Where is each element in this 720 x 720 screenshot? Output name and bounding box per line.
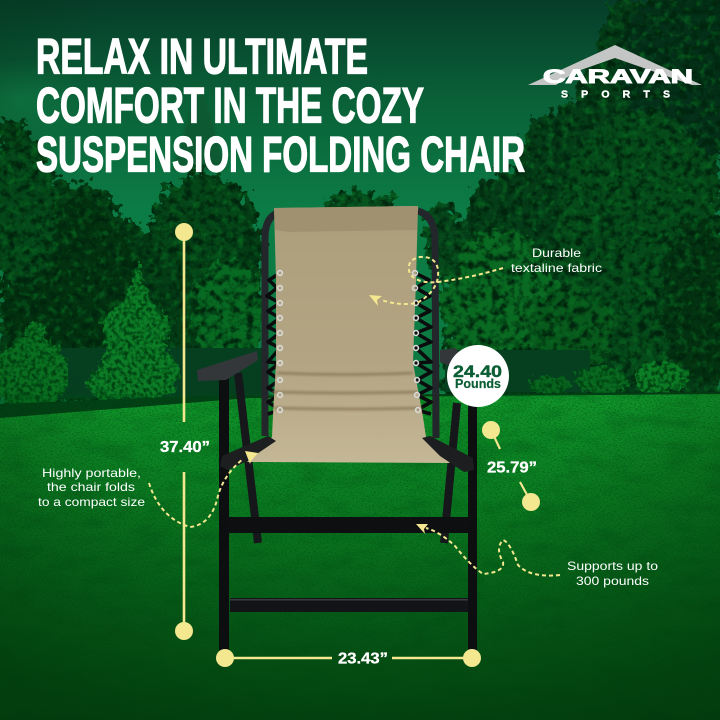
logo: Caravan Sports <box>528 45 702 100</box>
folding chair <box>197 206 477 650</box>
fabric sling <box>247 206 450 463</box>
right armrest <box>440 348 460 366</box>
sky <box>0 0 720 420</box>
faint tall tree behind title <box>172 78 226 170</box>
supports arrowhead <box>416 524 428 534</box>
supports callout text: Supports up to <box>567 559 658 573</box>
logo wordmark: CARAVAN <box>543 67 693 88</box>
rear legs <box>238 373 457 543</box>
supports callout text: 300 pounds <box>576 574 649 588</box>
width line <box>225 657 472 659</box>
grommets <box>278 271 420 412</box>
dimension: width 23.43 <box>216 649 481 668</box>
title line 1: RELAX IN ULTIMATE <box>36 28 368 84</box>
title <box>36 28 525 182</box>
front legs <box>219 378 477 650</box>
fabric dashed arrow <box>381 257 503 304</box>
portable callout text: to a compact size <box>38 495 145 509</box>
left tree mass <box>0 120 264 405</box>
right tall trees <box>440 0 720 400</box>
width right dot <box>463 649 481 667</box>
depth label: 25.79” <box>487 460 537 476</box>
badge unit: Pounds <box>455 377 501 391</box>
fabric arrowhead <box>369 295 382 306</box>
lower crossbar <box>230 598 468 612</box>
mid distant tree behind chair <box>326 190 460 280</box>
fabric callout text: textaline fabric <box>511 261 602 275</box>
lawn <box>0 394 720 720</box>
portable callout text: the chair folds <box>47 480 135 494</box>
dimension: depth 25.79 <box>482 421 540 511</box>
lacing cords <box>267 273 431 414</box>
logo roof <box>528 45 702 85</box>
bushes <box>0 319 690 413</box>
width left dot <box>216 649 234 667</box>
sky glow <box>0 60 90 140</box>
badge value: 24.40 <box>453 362 502 381</box>
title line 2: COMFORT IN THE COZY <box>36 78 424 134</box>
depth top dot <box>482 421 500 439</box>
height bottom dot <box>175 622 193 640</box>
depth bottom dot <box>522 493 540 511</box>
upper crossbar <box>228 517 470 533</box>
weight badge <box>447 345 509 407</box>
shadow under hedge <box>0 392 720 420</box>
callout: portable <box>38 451 258 527</box>
dimension: height 37.40 <box>160 223 210 640</box>
portable dashed arrow <box>149 459 243 527</box>
fabric top band <box>274 206 418 232</box>
width label: 23.43” <box>338 650 388 668</box>
seat side bars <box>220 436 474 472</box>
badge circle <box>447 345 509 407</box>
lawn grain <box>0 394 720 720</box>
fence <box>55 348 265 398</box>
height top dot <box>175 223 193 241</box>
callout: supports 300 pounds <box>416 524 658 588</box>
portable arrowhead <box>245 451 258 464</box>
conifer <box>85 262 180 400</box>
lower crossbar highlight <box>230 599 468 600</box>
height line <box>183 232 185 631</box>
supports dashed arrow <box>426 528 560 576</box>
height label: 37.40” <box>160 439 210 456</box>
back frame tube <box>265 211 436 438</box>
depth ticks <box>491 430 531 502</box>
callout: durable fabric <box>369 246 602 306</box>
logo subline: SPORTS <box>561 88 670 100</box>
fabric wrinkles <box>273 373 421 409</box>
lawn blotches <box>0 394 720 720</box>
fabric callout text: Durable <box>532 246 581 260</box>
portable callout text: Highly portable, <box>42 466 141 480</box>
left armrest <box>197 351 258 381</box>
